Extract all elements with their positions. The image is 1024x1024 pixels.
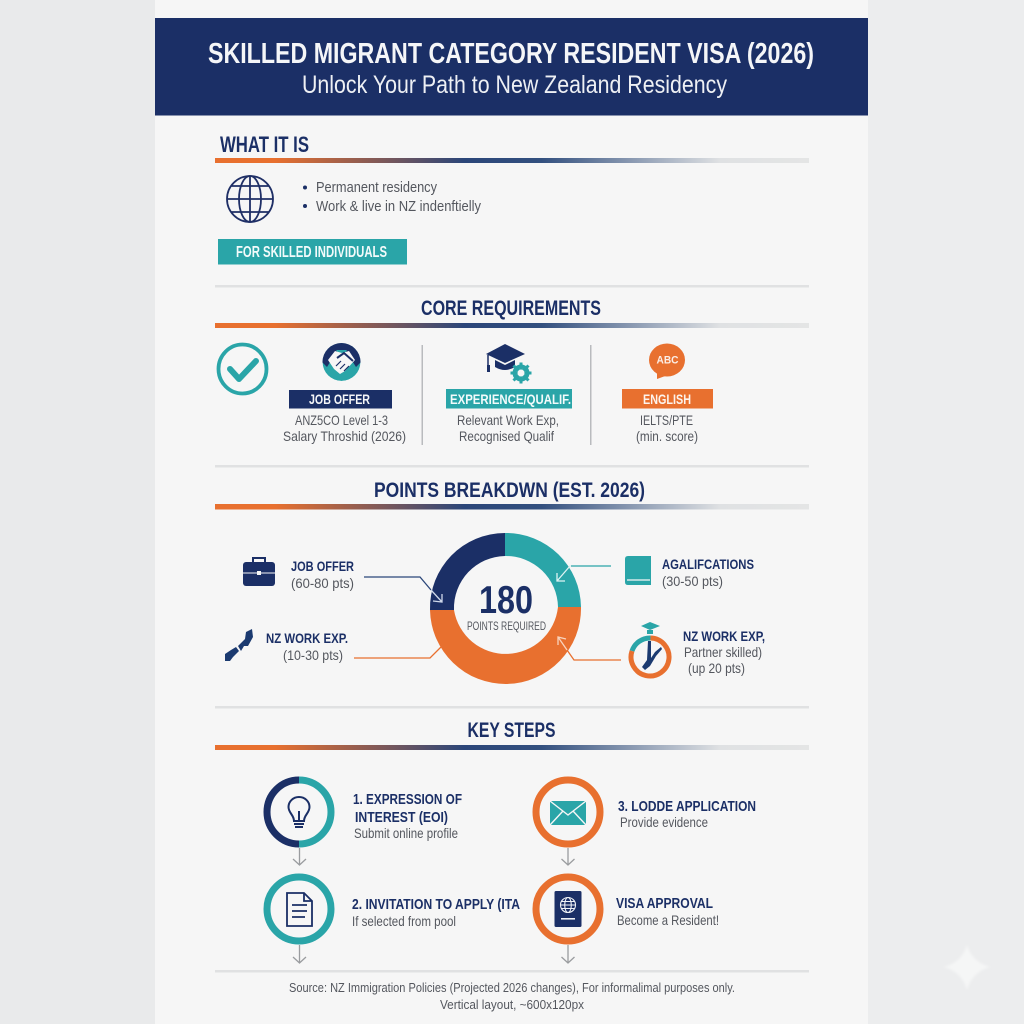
icon: handshake <box>322 343 361 381</box>
donut chart: POINTS REQUIRED <box>467 621 546 633</box>
step 1 text: 1. EXPRESSION OF <box>353 791 462 808</box>
step 3 text: Provide evidence <box>620 814 708 830</box>
label: job offer <box>291 558 354 591</box>
icon: book <box>625 556 651 585</box>
icon: graduation cap and gear <box>486 344 532 384</box>
arrow: step 2 onward <box>293 945 306 963</box>
label: partner skilled <box>683 628 765 676</box>
step 2 text: 2. INVITATION TO APPLY (ITA <box>352 896 520 913</box>
step 2 text: If selected from pool <box>352 913 456 929</box>
requirement: english: IELTS/PTE <box>640 412 693 428</box>
bullet list: Work & live in NZ indenftielly <box>316 198 481 215</box>
header banner <box>155 18 868 116</box>
step 3 text: 3. LODDE APPLICATION <box>618 798 756 815</box>
requirement: english <box>622 389 713 444</box>
footer source note: Vertical layout, ~600x120px <box>440 997 584 1012</box>
label: job offer: JOB OFFER <box>291 558 354 574</box>
subtitle: Unlock Your Path to New Zealand Residency <box>302 71 727 99</box>
heading: key steps: KEY STEPS <box>468 719 556 742</box>
requirement: experience and qualifications: Recognised Qualif <box>459 428 554 444</box>
label: NZ work experience <box>266 630 348 663</box>
requirement: job offer: Salary Throshid (2026) <box>283 428 406 444</box>
donut chart <box>430 533 581 684</box>
requirement: experience and qualifications: EXPERIENCE/QUALIF. <box>450 391 571 407</box>
footer source note: Source: NZ Immigration Policies (Projected 2026 changes), For informalimal purposes only. <box>289 980 735 995</box>
donut total: 180 <box>479 579 533 622</box>
requirement: english: (min. score) <box>636 428 698 444</box>
heading: what it is: WHAT IT IS <box>220 132 309 157</box>
label: job offer: (60-80 pts) <box>291 575 354 591</box>
arrow: job offer <box>364 577 442 602</box>
icon: ABC speech bubble: ABC <box>656 354 679 366</box>
icon: timer with cap and map <box>631 622 669 676</box>
panel: points breakdown <box>215 479 809 684</box>
step 1 text <box>353 791 462 841</box>
step 3 icon: envelope <box>536 780 600 844</box>
icon: NZ map <box>225 629 253 661</box>
badge: for skilled individuals <box>218 239 407 264</box>
bullet list <box>303 179 481 215</box>
requirement: job offer: JOB OFFER <box>309 391 370 407</box>
step 1 text: Submit online profile <box>354 825 458 841</box>
step 2 text <box>352 896 520 929</box>
bullet list: Permanent residency <box>316 179 437 196</box>
arrow: step 1 to 2 <box>293 848 306 865</box>
requirement: job offer: ANZ5CO Level 1-3 <box>295 412 388 428</box>
step 4 icon: passport <box>536 877 600 941</box>
requirement: job offer <box>283 390 406 444</box>
step 2 icon: document <box>267 877 331 941</box>
arrow: step 3 to 4 <box>562 848 574 865</box>
label: NZ work experience: NZ WORK EXP. <box>266 630 348 646</box>
step 4 text: VISA APPROVAL <box>616 895 713 912</box>
heading: core requirements: CORE REQUIREMENTS <box>421 297 601 320</box>
requirement: english: ENGLISH <box>643 391 691 407</box>
step 3 text <box>618 798 756 830</box>
arrow: step 4 onward <box>562 945 574 963</box>
footer source note <box>289 980 735 1012</box>
heading: points breakdown: POINTS BREAKDWN (EST. 2026) <box>374 479 645 502</box>
label: qualifications: (30-50 pts) <box>662 573 723 589</box>
title: SKILLED MIGRANT CATEGORY RESIDENT VISA (2026) <box>208 38 814 70</box>
requirement: experience and qualifications: Relevant Work Exp, <box>457 412 559 428</box>
leader line: NZ work experience <box>354 647 441 658</box>
label: partner skilled: Partner skilled) <box>684 644 762 660</box>
step 4 text <box>616 895 719 928</box>
label: NZ work experience: (10-30 pts) <box>283 647 343 663</box>
arrow: partner skilled <box>558 637 621 660</box>
step 1 icon: light bulb <box>267 780 331 844</box>
icon: sparkle watermark <box>944 945 990 990</box>
step 1 text: INTEREST (EOI) <box>355 809 448 826</box>
panel: key steps <box>215 719 809 963</box>
icon: briefcase <box>243 558 275 586</box>
label: qualifications <box>662 556 754 589</box>
badge: for skilled individuals: FOR SKILLED INDIVIDUALS <box>236 244 387 261</box>
icon: check mark <box>218 344 266 394</box>
label: qualifications: AGALIFCATIONS <box>662 556 754 572</box>
label: partner skilled: (up 20 pts) <box>688 660 745 676</box>
panel: core requirements <box>215 297 809 445</box>
icon: globe <box>227 176 273 222</box>
icon: ABC speech bubble <box>649 344 685 379</box>
panel: what it is <box>215 132 809 264</box>
arrow: qualifications <box>557 566 611 581</box>
label: partner skilled: NZ WORK EXP, <box>683 628 765 644</box>
step 4 text: Become a Resident! <box>617 912 719 928</box>
requirement: experience and qualifications <box>446 389 572 444</box>
